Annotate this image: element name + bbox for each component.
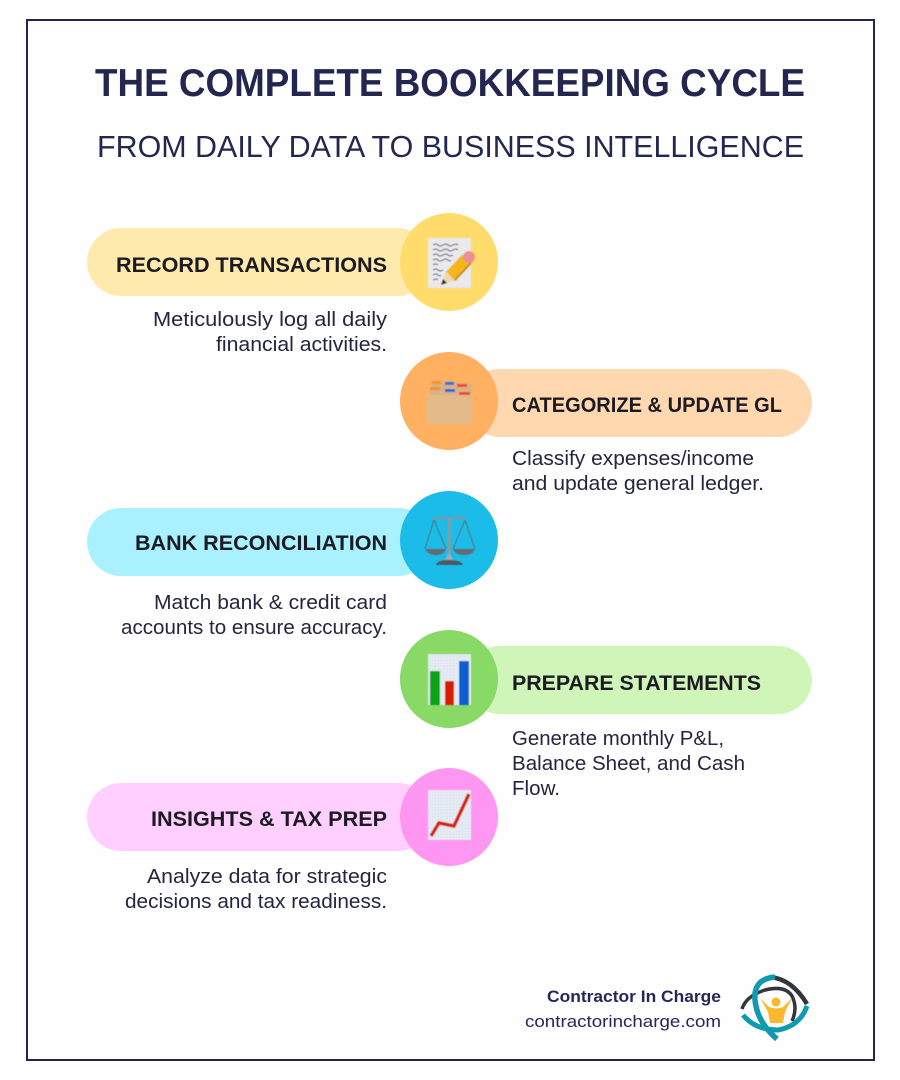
label: bank reconciliation: BANK RECONCILIATION: [135, 531, 387, 555]
panel: step 3 bank reconciliation: [87, 491, 498, 639]
circle: insights and tax prep: [400, 768, 498, 866]
description: categorize and update GL: and update general ledger.: [512, 473, 764, 495]
label: categorize and update GL: CATEGORIZE & UPDATE GL: [512, 393, 782, 417]
website: contractorincharge.com: [525, 1012, 721, 1031]
circle: record transactions: [400, 213, 498, 311]
logo: [742, 977, 807, 1039]
icon: bar chart: [428, 654, 471, 705]
description: insights and tax prep: [125, 866, 387, 913]
description: prepare statements: [512, 728, 745, 800]
icon: balance scale: [425, 518, 475, 565]
panel: step 2 categorize and update GL: [400, 352, 812, 495]
description: insights and tax prep: Analyze data for strategic: [147, 866, 387, 888]
description: record transactions: [153, 309, 387, 356]
description: prepare statements: Generate monthly P&L,: [512, 728, 724, 750]
panel: step 1 record transactions: [87, 213, 498, 356]
brand name: Contractor In Charge: [547, 987, 721, 1006]
label: insights and tax prep: INSIGHTS & TAX PREP: [151, 807, 387, 831]
description: record transactions: financial activities.: [216, 334, 387, 356]
title: THE COMPLETE BOOKKEEPING CYCLE: [95, 62, 805, 105]
description: bank reconciliation: Match bank & credit card: [154, 592, 387, 614]
label: prepare statements: PREPARE STATEMENTS: [512, 671, 761, 695]
panel: step 5 insights and tax prep: [87, 768, 498, 913]
panel: step 4 prepare statements: [400, 630, 812, 800]
circle: prepare statements: [400, 630, 498, 728]
pill: record transactions: [87, 228, 432, 296]
pill: bank reconciliation: [87, 508, 432, 576]
footer brand: [525, 977, 807, 1039]
circle: categorize and update GL: [400, 352, 498, 450]
description: record transactions: Meticulously log all daily: [153, 309, 387, 331]
icon: card file box: [427, 381, 472, 424]
pill: categorize and update GL: [466, 369, 812, 437]
label: record transactions: RECORD TRANSACTIONS: [116, 253, 387, 277]
icon: memo and pencil: [428, 238, 475, 288]
description: categorize and update GL: Classify expenses/income: [512, 448, 754, 470]
description: prepare statements: Flow.: [512, 778, 560, 800]
description: insights and tax prep: decisions and tax readiness.: [125, 891, 387, 913]
description: categorize and update GL: [512, 448, 764, 495]
description: bank reconciliation: accounts to ensure accuracy.: [121, 617, 387, 639]
icon: line chart: [428, 790, 471, 840]
pill: prepare statements: [466, 646, 812, 714]
description: bank reconciliation: [121, 592, 387, 639]
pill: insights and tax prep: [87, 783, 432, 851]
circle: bank reconciliation: [400, 491, 498, 589]
subtitle: FROM DAILY DATA TO BUSINESS INTELLIGENCE: [97, 129, 804, 164]
description: prepare statements: Balance Sheet, and Cash: [512, 753, 745, 775]
